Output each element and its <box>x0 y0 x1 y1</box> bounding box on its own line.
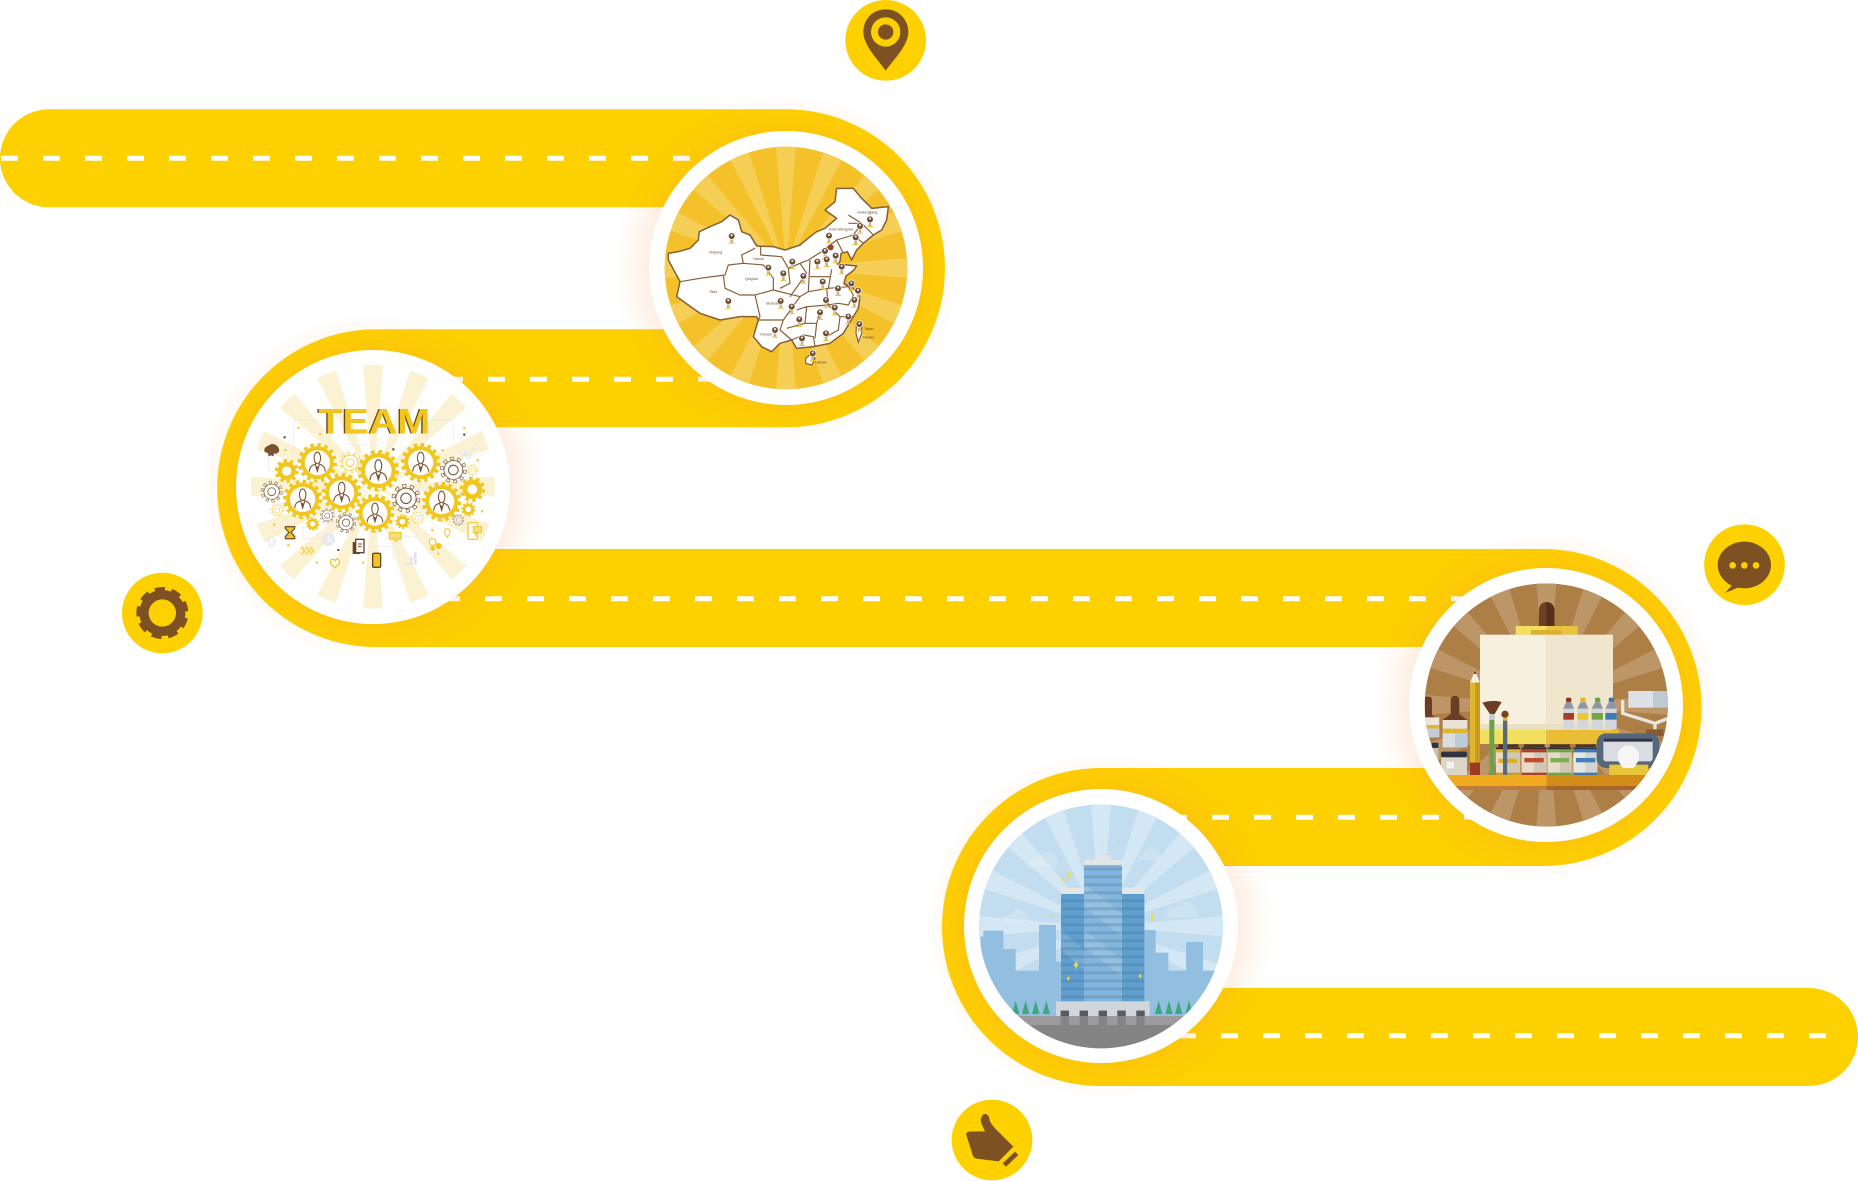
ground and entrance <box>1018 1001 1184 1048</box>
tower <box>1061 842 1144 1001</box>
china map <box>668 188 888 365</box>
clouds <box>1004 848 1198 922</box>
map labels: Qinghai <box>745 277 758 281</box>
map labels: Taipei <box>864 327 874 331</box>
map labels: Tibet <box>709 290 717 294</box>
tape and roller <box>1600 691 1669 775</box>
icon: gear <box>122 573 203 653</box>
heading: TEAM: TEAM <box>318 402 430 441</box>
map labels: Hainan <box>815 360 827 364</box>
road <box>49 158 1809 1037</box>
map labels: Yunnan <box>759 333 772 337</box>
panel: team disc <box>236 350 510 624</box>
city skyline <box>973 893 1227 1047</box>
map labels: Taiwan <box>863 336 874 340</box>
road dashes <box>1 158 1826 1036</box>
circle shadows <box>199 94 1720 1100</box>
map labels: Gansu <box>753 257 764 261</box>
easel and canvas <box>1480 602 1619 744</box>
map labels: Sichuan <box>766 302 779 306</box>
map labels: Xinjiang <box>709 250 722 254</box>
paint tubes <box>1563 698 1617 729</box>
map pins <box>725 216 874 361</box>
map labels: Heilongjiang <box>857 210 877 214</box>
panel: office building disc <box>964 789 1238 1063</box>
shelf <box>1443 775 1650 790</box>
brushes and pencil <box>1425 671 1509 775</box>
sparkles <box>1050 839 1156 982</box>
icon: location pin <box>845 0 926 81</box>
gears <box>262 445 483 532</box>
small team icons <box>265 426 483 568</box>
map labels <box>709 210 877 364</box>
paint jars <box>1496 744 1597 775</box>
icon: chat bubble <box>1704 524 1785 605</box>
icon: thumbs up <box>952 1100 1032 1180</box>
panel: china map disc <box>649 131 923 405</box>
map labels: Inner Mongolia <box>829 228 854 232</box>
trees <box>1012 1001 1193 1014</box>
panel: painter disc <box>1409 568 1683 842</box>
heading: TEAM: TEAM <box>317 402 429 441</box>
